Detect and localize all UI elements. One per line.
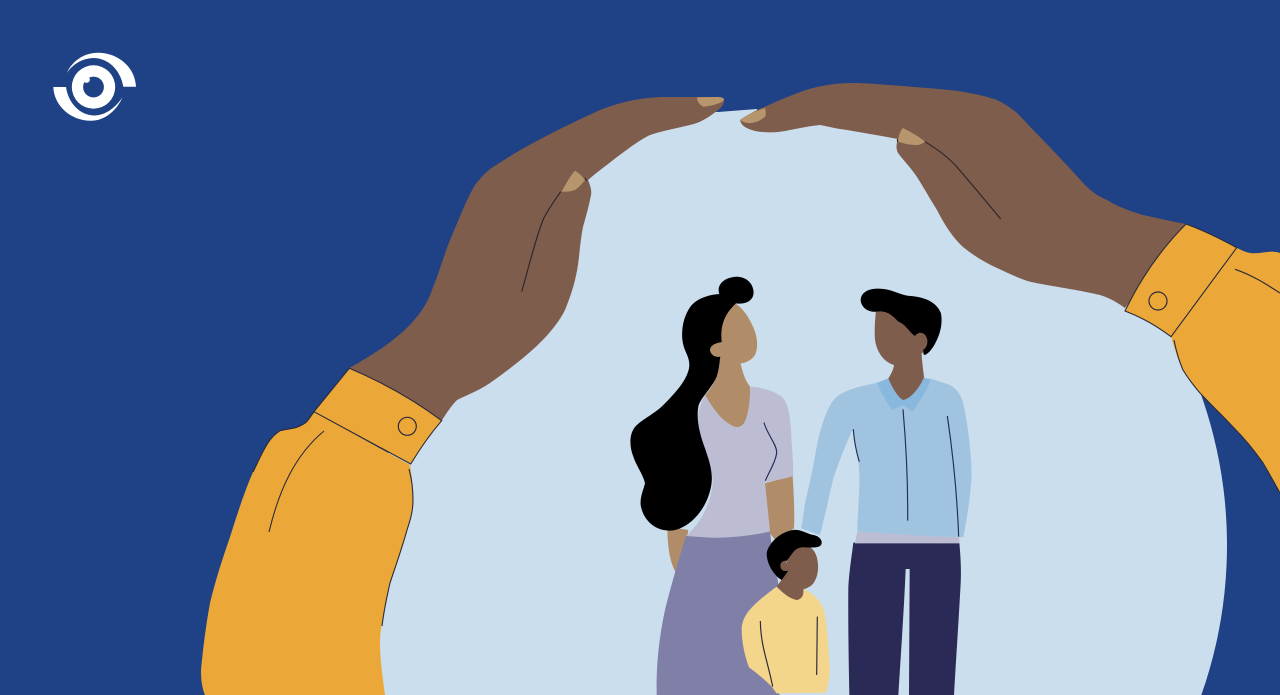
sleeve outlines — [253, 412, 413, 626]
ear — [915, 333, 927, 350]
light blue protective circle — [379, 108, 1227, 695]
sweater lines — [760, 617, 817, 687]
child — [742, 530, 830, 693]
fingernail — [697, 97, 724, 107]
trousers — [848, 543, 961, 695]
neck and head — [875, 310, 928, 400]
sleeve body — [1171, 248, 1280, 493]
left cuff — [314, 368, 442, 464]
shirt — [801, 378, 972, 537]
right sleeve — [1125, 224, 1280, 493]
back arm — [667, 527, 688, 573]
left sleeve — [201, 368, 442, 695]
hand shape — [740, 83, 1186, 308]
cuff button — [398, 417, 416, 435]
cuff button — [1149, 292, 1167, 310]
ear — [710, 342, 723, 357]
left hand — [349, 97, 724, 421]
man — [801, 289, 972, 695]
thumb crease — [898, 139, 1001, 219]
skirt — [657, 532, 780, 695]
sleeve fold line — [269, 431, 324, 532]
neck and head — [777, 543, 818, 600]
blouse — [686, 387, 793, 538]
fingernail — [740, 108, 766, 123]
family group — [630, 277, 972, 695]
thumbnail — [562, 171, 585, 192]
collar — [877, 377, 931, 412]
waistband — [855, 532, 959, 543]
right cuff — [1125, 224, 1237, 337]
front arm — [764, 476, 794, 541]
woman — [630, 277, 794, 695]
sleeve outlines — [1174, 269, 1280, 493]
sleeve body — [201, 412, 413, 695]
thumb crease — [522, 178, 587, 292]
icon: eye logo — [53, 53, 136, 121]
neck and chest — [705, 303, 757, 427]
hair — [861, 289, 942, 355]
thumbnail — [898, 128, 925, 145]
shirt lines — [853, 409, 959, 537]
hair — [767, 530, 822, 580]
blouse fold line — [764, 423, 777, 481]
sweater — [742, 587, 830, 693]
right hand — [740, 83, 1186, 308]
ear — [780, 561, 788, 571]
hand shape — [349, 97, 724, 421]
hair — [630, 277, 754, 531]
